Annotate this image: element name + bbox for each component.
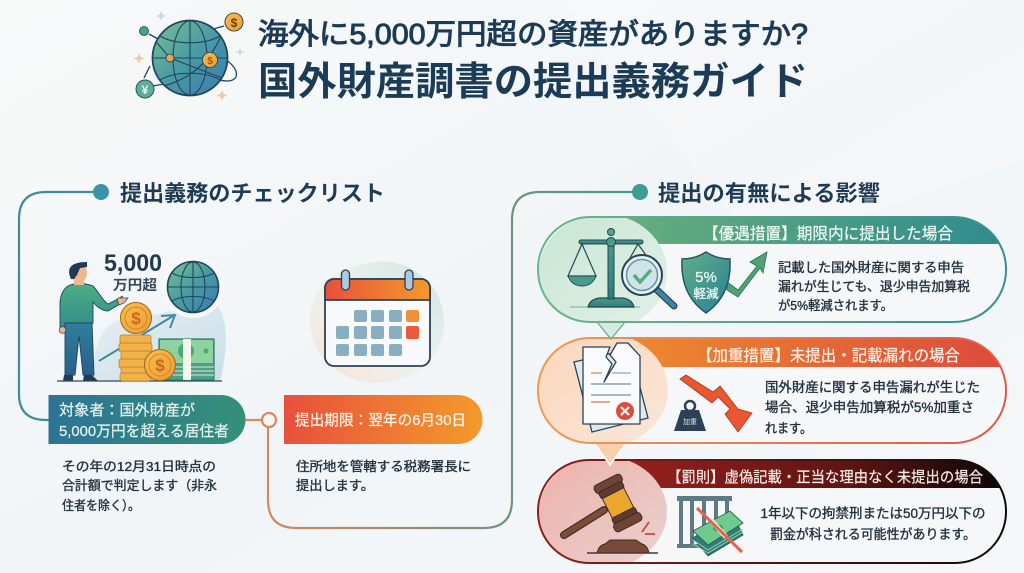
icon: rising green arrow <box>727 252 767 297</box>
heading dot right <box>632 184 648 200</box>
pointer: penalty <box>594 443 626 465</box>
coin top <box>120 302 152 334</box>
text: surcharge body <box>765 380 980 436</box>
arrow: rising <box>99 315 175 361</box>
icon: falling arrow <box>680 375 752 432</box>
header: penalty: 【罰則】虚偽記載・正当な理由なく未提出の場合 <box>667 469 983 486</box>
text: preferential body: 記載した国外財産に関する申告 <box>778 260 964 275</box>
icon: globe with orbit and coins: $ <box>231 16 238 30</box>
text: surcharge body: 国外財産に関する申告漏れが生じた <box>765 380 980 395</box>
header: preferential: 【優遇措置】期限内に提出した場合 <box>703 225 953 243</box>
coin top: $ <box>131 309 141 328</box>
connector node <box>262 413 276 427</box>
icon: torn document <box>574 343 648 432</box>
connector line: deadline and impact <box>245 192 640 528</box>
text: surcharge body: 場合、退少申告加算税が5%加重さ <box>765 400 974 415</box>
cash stack <box>693 511 743 556</box>
pill: deadline <box>284 395 482 444</box>
pointer: surcharge <box>597 322 625 339</box>
panel: preferential <box>538 214 1006 330</box>
icon: globe with orbit and coins: ¥ <box>142 83 149 97</box>
heading: impact: 提出の有無による影響 <box>658 181 880 206</box>
text: penalty body: 1年以下の拘禁刑または50万円以下の <box>760 506 986 521</box>
text: surcharge body: れます。 <box>765 421 812 436</box>
label: 5,000: 5,000 <box>104 250 162 277</box>
pill: target <box>48 395 245 444</box>
globe small <box>162 256 224 318</box>
title line 2: 国外財産調書の提出義務ガイド <box>258 61 808 104</box>
figure: person <box>59 262 128 381</box>
illustration: person with assets <box>57 250 226 381</box>
text: preferential body <box>778 260 970 313</box>
text: deadline description: 提出します。 <box>296 478 374 493</box>
pill text: target line 2: 5,000万円を超える居住者 <box>59 423 229 440</box>
text: deadline description: 住所地を管轄する税務署長に <box>296 459 471 474</box>
text: target description <box>62 459 217 513</box>
panel: surcharge <box>538 333 1006 447</box>
text: preferential body: 漏れが生じても、退少申告加算税 <box>778 279 970 294</box>
coin front <box>144 350 176 380</box>
text: penalty body: 罰金が科される可能性があります。 <box>770 527 976 542</box>
icon: calendar <box>310 262 444 383</box>
header: surcharge: 【加重措置】未提出・記載漏れの場合 <box>697 347 960 365</box>
heading: checklist: 提出義務のチェックリスト <box>120 181 385 206</box>
banknotes <box>159 339 214 380</box>
icon: globe with orbit and coins <box>134 11 245 101</box>
text: target description: 合計額で判定します（非永 <box>62 478 217 493</box>
icon: weight: 加重 <box>683 417 697 426</box>
icon: gavel <box>564 473 658 553</box>
icon: globe with orbit and coins: $ <box>207 56 213 67</box>
title <box>258 18 808 104</box>
pill text: target line 1: 対象者：国外財産が <box>59 402 195 419</box>
heading dot left <box>93 184 109 200</box>
coin front: $ <box>155 356 165 375</box>
icon: shield 5%: 軽減 <box>693 286 719 301</box>
icon: weight <box>674 401 706 431</box>
title line 1: 海外に5,000万円超の資産がありますか? <box>258 18 808 51</box>
icon: scales and magnifier <box>568 228 674 307</box>
coin stack <box>119 335 152 381</box>
panel: penalty <box>538 456 1006 568</box>
icon: shield 5% <box>682 252 730 313</box>
text: deadline description <box>296 459 471 493</box>
connector line: checklist <box>19 192 101 420</box>
text: target description: 住者を除く）。 <box>62 498 140 513</box>
ground line <box>57 380 222 382</box>
text: penalty body <box>760 506 986 542</box>
text: preferential body: が5%軽減されます。 <box>778 298 893 313</box>
icon: shield 5%: 5% <box>695 269 717 286</box>
label: 万円超: 万円超 <box>113 277 157 293</box>
pill text: deadline: 提出期限：翌年の6月30日 <box>295 412 466 429</box>
text: target description: その年の12月31日時点の <box>62 459 216 474</box>
icon: bars and cash <box>677 496 743 556</box>
